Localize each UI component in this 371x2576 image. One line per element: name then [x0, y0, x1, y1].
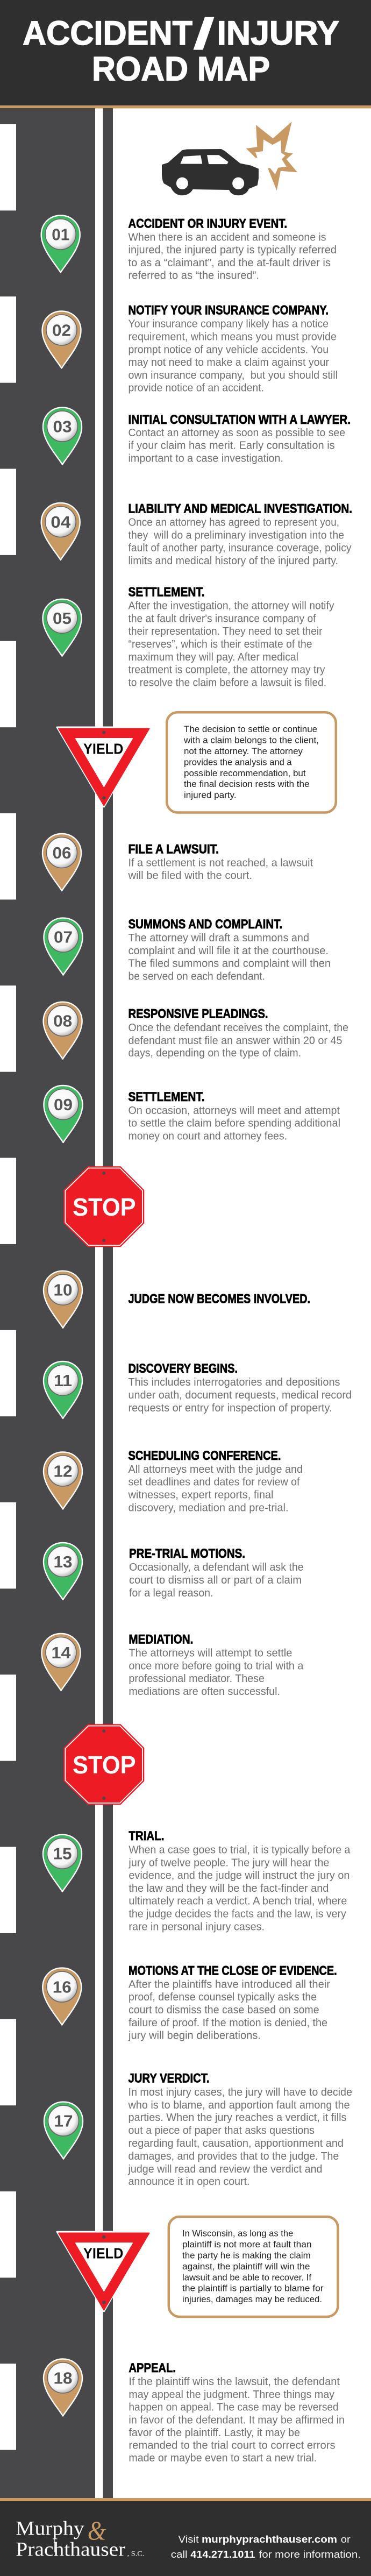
body text: professional mediator. These [129, 1673, 265, 1685]
pin 09 [44, 1085, 83, 1142]
pin 06 [42, 834, 81, 891]
body text [128, 516, 352, 567]
icon: impact star [246, 122, 297, 190]
heading: ACCIDENT OR INJURY EVENT. [128, 216, 287, 231]
callout: decision to settle: injured party. [184, 791, 237, 800]
step 07 [44, 917, 331, 982]
body text: own insurance company, but you should still [128, 370, 338, 381]
pin 08 [44, 1002, 82, 1059]
callout: decision to settle: provides the analysis and a [184, 757, 292, 767]
body text: in favor of the defendant. It may be affirmed in [129, 2414, 345, 2426]
step 05 [43, 585, 334, 689]
callout: Wisconsin comparative fault [169, 2217, 338, 2317]
pin 16: 16 [53, 1978, 72, 1997]
pin 10 [44, 1271, 82, 1328]
body text: jury of twelve people. The jury will hear the [128, 1857, 329, 1869]
step 16 [42, 1963, 337, 2042]
body text [128, 427, 345, 465]
body text [128, 318, 338, 394]
body text: defendant must file an answer within 20 or 45 [128, 1035, 342, 1047]
title: ACCIDENT [23, 15, 192, 52]
body text: injured, the injured party is typically referred [128, 244, 337, 256]
body text: Contact an attorney as soon as possible to see [128, 427, 345, 439]
body text: evidence, and the judge will instruct the jury on [129, 1870, 349, 1882]
pin 08: 08 [53, 1012, 72, 1031]
footer band [0, 2498, 371, 2576]
header band [0, 0, 371, 109]
body text: If a settlement is not reached, a lawsuit [128, 857, 313, 869]
pin 17: 17 [54, 2112, 73, 2131]
pin 02: 02 [52, 321, 71, 340]
body text: referred to as “the insured”. [128, 269, 259, 281]
body text: parties. When the jury reaches a verdict, it fills [128, 2112, 346, 2124]
callout: Wisconsin comparative fault: plaintiff is not more at fault than [182, 2240, 312, 2249]
step 08 [44, 1002, 348, 1059]
title [23, 10, 339, 88]
pin 13 [44, 1543, 82, 1600]
body text: requirement, which means you must provide [128, 331, 337, 343]
body text: In most injury cases, the jury will have to decide [128, 2087, 352, 2098]
body text: remanded to the trial court to correct errors [129, 2440, 336, 2452]
icon: car crash [162, 122, 297, 195]
body text [128, 1464, 303, 1514]
contact text: murphyprachthauser.com [202, 2534, 337, 2545]
body text [128, 1105, 340, 1142]
logo: Murphy & Prachthauser [16, 2515, 144, 2561]
callout: decision to settle: not the attorney. The attorney [184, 747, 303, 756]
icon: car [162, 149, 259, 195]
body text: Once the defendant receives the complaint, the [128, 1022, 348, 1034]
body text [129, 2376, 345, 2464]
body text [129, 1648, 304, 1698]
contact text [171, 2534, 361, 2560]
body text: On occasion, attorneys will meet and attempt [128, 1105, 340, 1117]
pin 13: 13 [54, 1552, 72, 1571]
callout: Wisconsin comparative fault: the plaintiff is partially to blame for [182, 2284, 324, 2294]
body text [128, 1844, 351, 1933]
callout: Wisconsin comparative fault: the party he is making the claim [182, 2251, 311, 2260]
pin 02 [42, 311, 81, 368]
pin 18 [44, 2359, 82, 2416]
step 18 [44, 2359, 345, 2464]
body text: to resolve the claim before a lawsuit is filed. [128, 677, 326, 689]
logo: Murphy & Prachthauser: & [88, 2515, 106, 2545]
pin 12: 12 [54, 1462, 72, 1480]
pin 03 [43, 408, 82, 465]
body text: After the investigation, the attorney will notify [128, 600, 334, 612]
step 11 [44, 1361, 352, 1418]
step 15 [43, 1829, 351, 1933]
body text: mediations are often successful. [129, 1686, 280, 1698]
body text: the judge decides the facts and the law, is very [129, 1908, 346, 1920]
body text: complaint and will file it at the courthouse. [128, 945, 329, 957]
pin 01 [41, 215, 80, 272]
contact text: 414.271.1011 [190, 2549, 255, 2560]
pin 07: 07 [54, 928, 73, 947]
pin 06: 06 [53, 843, 71, 862]
body text: Once an attorney has agreed to represent you, [128, 516, 339, 528]
body text: money on court and attorney fees. [128, 1130, 287, 1142]
stop sign [63, 1166, 144, 1247]
contact text: Visit [178, 2534, 199, 2545]
heading: APPEAL. [129, 2361, 176, 2375]
callout: Wisconsin comparative fault: lawsuit and be able to recover. If [182, 2273, 311, 2282]
heading: MEDIATION. [129, 1633, 193, 1647]
yield sign: YIELD [83, 2245, 123, 2262]
body text: ultimately reach a verdict. A bench trial, where [129, 1895, 347, 1907]
body text: court to dismiss the case based on some [129, 2004, 319, 2016]
contact text: for more information. [259, 2549, 361, 2560]
step 17 [44, 2071, 352, 2188]
yield sign [57, 727, 150, 807]
body text: damages, and provides that to the judge. The [128, 2151, 339, 2162]
body text: proof, defense counsel typically asks the [129, 1991, 317, 2003]
title: ROAD MAP [92, 51, 270, 88]
body text [128, 1022, 348, 1059]
body text: provide notice of an accident. [128, 382, 264, 394]
body text: if your claim has merit. Early consultation is [128, 440, 335, 452]
body text: who is to blame, and apportion fault among the [128, 2099, 349, 2111]
pin 15: 15 [53, 1844, 72, 1863]
pin 04 [41, 503, 80, 560]
body text: discovery, mediation and pre-trial. [128, 1502, 288, 1514]
yield sign: YIELD [83, 741, 123, 757]
heading: RESPONSIVE PLEADINGS. [128, 1006, 268, 1021]
heading: SETTLEMENT. [128, 585, 204, 600]
pin 10: 10 [54, 1281, 72, 1300]
body text: out a piece of paper that asks questions [128, 2125, 315, 2137]
body text: days, depending on the type of claim. [128, 1047, 301, 1059]
callout: decision to settle: The decision to settle or continue [184, 725, 317, 734]
pin 03: 03 [53, 417, 72, 436]
pin 05 [43, 599, 82, 656]
body text: the at fault driver's insurance company of [128, 613, 316, 625]
stop sign: STOP [73, 1751, 136, 1779]
body text: treatment is complete, the attorney may try [128, 664, 325, 676]
heading: JUDGE NOW BECOMES INVOLVED. [128, 1291, 310, 1306]
body text: After the plaintiffs have introduced all their [129, 1978, 330, 1990]
body text: important to a case investigation. [128, 453, 283, 465]
body text: court to dismiss all or part of a claim [129, 1574, 302, 1586]
step 06 [42, 834, 313, 891]
logo: Murphy & Prachthauser: , S.C. [127, 2550, 144, 2558]
body text: failure of proof. If the motion is denied, the [129, 2017, 327, 2029]
body text [127, 857, 313, 882]
body text: When there is an accident and someone is [128, 231, 326, 243]
body text: their representation. They need to set their [128, 626, 323, 637]
pin 17 [44, 2102, 83, 2159]
body text: set deadlines and dates for review of [128, 1477, 300, 1488]
body text: be served on each defendant. [128, 970, 265, 982]
pin 14 [42, 1634, 81, 1691]
body text: under oath, document requests, medical record [128, 1389, 352, 1401]
body text [128, 2087, 352, 2188]
body text: requests or entry for inspection of property. [128, 1402, 332, 1414]
pin 04: 04 [51, 513, 71, 531]
callout: decision to settle: the final decision rests with the [184, 779, 310, 789]
body text: once more before going to trial with a [129, 1660, 304, 1672]
body text: to settle the claim before spending additional [128, 1117, 340, 1129]
body text [129, 1562, 304, 1599]
heading: TRIAL. [129, 1829, 164, 1843]
heading: SCHEDULING CONFERENCE. [128, 1449, 281, 1463]
body text: they will do a preliminary investigation into the [128, 529, 344, 541]
stop sign: STOP [73, 1193, 136, 1221]
body text: Your insurance company likely has a notice [128, 318, 329, 330]
body text: fault of another party, insurance coverage, policy [128, 542, 352, 554]
pin 09: 09 [54, 1095, 73, 1114]
body text [128, 1978, 330, 2042]
logo: Murphy & Prachthauser: Prachthauser [16, 2539, 125, 2561]
pin 12 [44, 1452, 82, 1509]
pin 07 [44, 918, 83, 975]
step 01 [41, 215, 337, 281]
pin 11 [44, 1361, 82, 1418]
step 14 [42, 1633, 304, 1698]
contact text: or [341, 2534, 351, 2545]
body text: “reserves”, which is their estimate of the [128, 638, 312, 650]
road [0, 108, 113, 2498]
body text: If the plaintiff wins the lawsuit, the defendant [129, 2376, 340, 2388]
heading: DISCOVERY BEGINS. [128, 1361, 238, 1376]
body text: All attorneys meet with the judge and [128, 1464, 303, 1475]
body text: Occasionally, a defendant will ask the [129, 1562, 304, 1573]
step 13 [44, 1543, 304, 1600]
yield sign [57, 2232, 150, 2311]
step 03 [43, 408, 351, 465]
callout: decision to settle: possible recommendation, but [184, 769, 306, 778]
callout: Wisconsin comparative fault: In Wisconsin, as long as the [182, 2229, 293, 2239]
body text: made or maybe even to start a new trial. [129, 2452, 317, 2464]
pin 18: 18 [54, 2369, 72, 2387]
heading: FILE A LAWSUIT. [128, 842, 219, 857]
body text: may not need to make a claim against your [128, 357, 329, 368]
heading: SETTLEMENT. [128, 1090, 204, 1104]
body text [128, 932, 331, 982]
stop sign [63, 1724, 144, 1805]
body text: for a legal reason. [129, 1587, 213, 1599]
pin 14: 14 [52, 1643, 71, 1662]
heading: PRE-TRIAL MOTIONS. [129, 1546, 245, 1561]
callout: Wisconsin comparative fault: injuries, damages may be reduced. [182, 2295, 322, 2304]
pin 16 [42, 1968, 81, 2025]
body text: will be filed with the court. [127, 870, 252, 882]
body text: The attorney will draft a summons and [128, 932, 309, 944]
body text [128, 600, 334, 689]
callout: decision to settle [167, 712, 336, 812]
step 10 [44, 1271, 310, 1328]
body text: rare in personal injury cases. [129, 1921, 265, 1933]
body text: The attorneys will attempt to settle [129, 1648, 292, 1659]
callout: decision to settle: with a claim belongs to the client, [183, 736, 319, 746]
pin 01: 01 [52, 225, 69, 244]
pin 05: 05 [53, 609, 72, 628]
body text: favor of the plaintiff. Lastly, it may be [129, 2427, 300, 2439]
body text: announce it in open court. [128, 2176, 249, 2188]
heading: SUMMONS AND COMPLAINT. [128, 917, 282, 932]
body text: The filed summons and complaint will then [128, 957, 331, 969]
body text [128, 1376, 352, 1414]
body text: happen on appeal. The case may be reversed [129, 2402, 339, 2414]
body text: witnesses, expert reports, final [128, 1489, 273, 1501]
body text: limits and medical history of the injured party. [128, 555, 338, 567]
body text: prompt notice of any vehicle accidents. You [128, 344, 329, 356]
pin 11: 11 [54, 1371, 72, 1390]
body text: to as a “claimant”, and the at-fault driver is [128, 257, 331, 269]
body text: judge will read and review the verdict and [128, 2163, 323, 2175]
callout: Wisconsin comparative fault: against, the plaintiff will win the [182, 2262, 310, 2272]
body text: the law and they will be the fact-finder and [129, 1883, 329, 1894]
contact text: call [171, 2549, 188, 2560]
title: / [192, 10, 215, 59]
heading: NOTIFY YOUR INSURANCE COMPANY. [128, 303, 329, 318]
title: INJURY [217, 15, 339, 52]
body text: When a case goes to trial, it is typically before a [129, 1844, 351, 1856]
body text [128, 231, 337, 281]
body text: maximum they will pay. After medical [128, 651, 298, 663]
pin 15 [43, 1835, 82, 1892]
step 09 [44, 1085, 340, 1142]
logo: Murphy & Prachthauser: Murphy [16, 2517, 84, 2539]
step 02 [42, 303, 338, 394]
body text: This includes interrogatories and depositions [128, 1376, 340, 1388]
body text: jury will begin deliberations. [128, 2030, 261, 2042]
step 04 [41, 502, 352, 567]
body text: regarding fault, causation, apportionment and [128, 2138, 344, 2149]
body text: may appeal the judgment. Three things may [129, 2389, 334, 2401]
step 12 [44, 1449, 303, 1514]
heading: JURY VERDICT. [128, 2071, 210, 2085]
